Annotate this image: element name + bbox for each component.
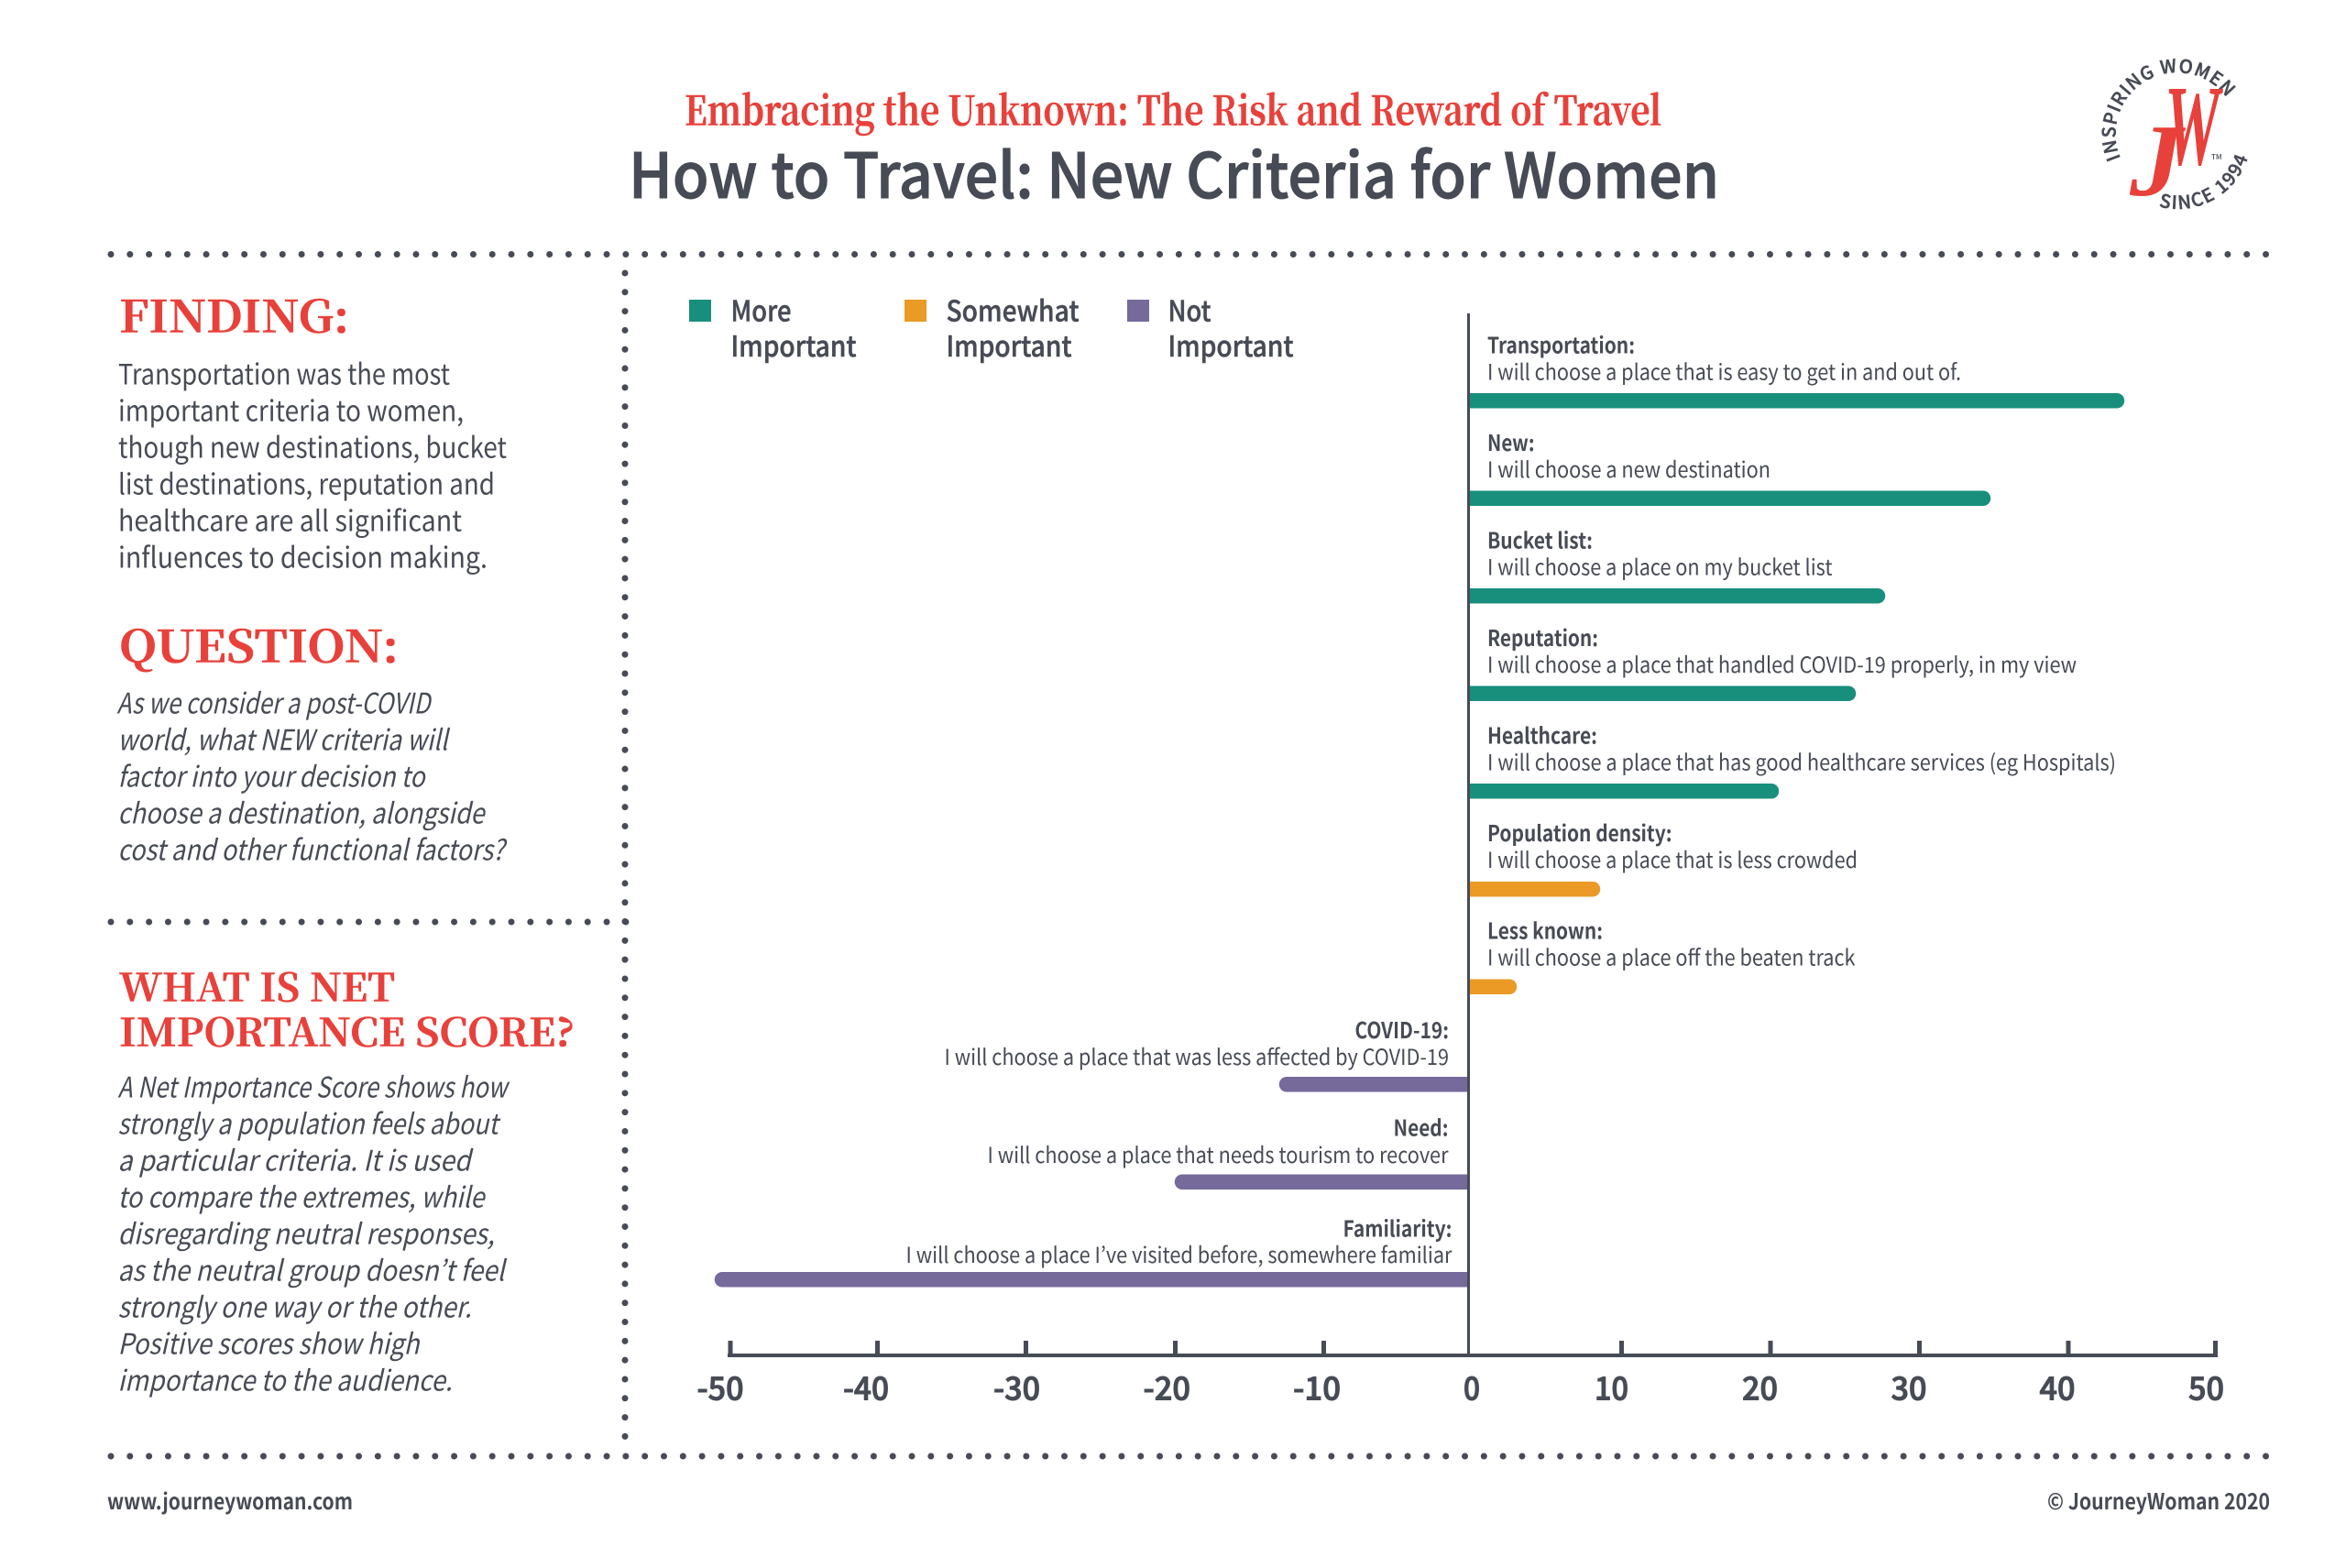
row: reputation: I will choose a place that handled COVID-19 properly, in my view — [1487, 647, 2077, 679]
question text — [117, 680, 508, 869]
net importance explanation: a particular criteria. It is used — [117, 1138, 474, 1179]
net importance explanation: disregarding neutral responses, — [117, 1212, 495, 1252]
footer — [107, 1484, 2270, 1516]
row: covid-19 — [944, 1013, 1468, 1092]
x axis labels — [696, 1364, 2224, 1409]
heading: net importance score: IMPORTANCE SCORE? — [119, 1003, 575, 1058]
finding text: healthcare are all significant — [118, 499, 462, 539]
row: covid-19: I will choose a place that was less affected by COVID-19 — [944, 1039, 1449, 1071]
row: reputation — [1468, 620, 2077, 701]
row: familiarity: Familiarity: — [1343, 1212, 1452, 1243]
title: How to Travel: New Criteria for Women — [629, 126, 1719, 216]
panel: finding — [118, 282, 507, 576]
legend: not important — [1127, 288, 1294, 365]
legend: not important: Important — [1168, 323, 1294, 365]
heading: net importance score: WHAT IS NET — [119, 959, 395, 1014]
subtitle: Embracing the Unknown: The Risk and Reward of Travel — [685, 79, 1661, 137]
legend: somewhat important: Somewhat — [946, 288, 1080, 330]
finding text: Transportation was the most — [118, 352, 450, 392]
row: new: I will choose a new destination — [1487, 452, 1770, 484]
finding text: though new destinations, bucket — [118, 425, 507, 466]
x axis labels: 0 — [1464, 1364, 1480, 1409]
x axis labels: 10 — [1595, 1364, 1628, 1409]
row: healthcare: I will choose a place that has good healthcare services (eg Hospitals) — [1487, 744, 2116, 777]
logo monogram — [2129, 63, 2223, 218]
net importance explanation: importance to the audience. — [117, 1358, 453, 1398]
finding text: influences to decision making. — [118, 535, 488, 576]
x axis labels: -40 — [843, 1364, 889, 1409]
row: new: New: — [1487, 425, 1534, 457]
legend: more important: Important — [731, 323, 856, 365]
row: reputation: Reputation: — [1487, 620, 1598, 652]
row: new — [1468, 425, 1990, 506]
header title block — [629, 79, 1719, 216]
row: bucket list — [1468, 522, 1885, 603]
row: less known: Less known: — [1487, 913, 1603, 946]
x axis labels: -20 — [1144, 1364, 1190, 1409]
row: less known — [1468, 913, 1855, 994]
legend: more important — [689, 288, 856, 365]
net importance explanation: Positive scores show high — [117, 1321, 421, 1362]
logo monogram: J — [2129, 104, 2186, 218]
x axis labels: 20 — [1742, 1364, 1778, 1409]
x axis labels: -30 — [993, 1364, 1040, 1409]
question text: As we consider a post-COVID — [117, 680, 433, 722]
row: transportation — [1468, 328, 2124, 409]
legend: somewhat important: Important — [946, 323, 1072, 365]
row: population density: I will choose a place that is less crowded — [1487, 842, 1858, 874]
x axis — [696, 1341, 2224, 1409]
question text: cost and other functional factors? — [117, 827, 508, 869]
panel: question — [117, 612, 508, 869]
net importance explanation: A Net Importance Score shows how — [117, 1065, 510, 1105]
question text: world, what NEW criteria will — [117, 717, 450, 759]
logo: JourneyWoman badge — [2101, 59, 2247, 218]
row: transportation: I will choose a place that is easy to get in and out of. — [1487, 354, 1961, 387]
heading: finding: FINDING: — [119, 282, 349, 345]
row: familiarity — [715, 1212, 1468, 1287]
x axis labels: 40 — [2040, 1364, 2075, 1409]
finding text — [118, 352, 507, 576]
heading: question: QUESTION: — [119, 612, 399, 674]
row: need: Need: — [1393, 1111, 1448, 1142]
legend: somewhat important — [904, 288, 1080, 365]
logo monogram: W — [2165, 63, 2223, 190]
net importance explanation: as the neutral group doesn’t feel — [117, 1248, 507, 1288]
legend — [689, 288, 1294, 365]
footer: website: www.journeywoman.com — [107, 1484, 353, 1516]
question text: factor into your decision to — [117, 753, 426, 795]
row: healthcare — [1468, 718, 2116, 799]
x axis labels: -50 — [696, 1364, 744, 1409]
row: covid-19: COVID-19: — [1354, 1013, 1449, 1045]
bar chart: net importance score — [696, 313, 2224, 1409]
row: population density — [1468, 816, 1858, 896]
logo: JourneyWoman badge: TM — [2211, 152, 2222, 162]
row: less known: I will choose a place off the beaten track — [1487, 940, 1855, 971]
row: need — [988, 1111, 1468, 1190]
row: bucket list: Bucket list: — [1487, 522, 1593, 555]
logo: JourneyWoman badge: INSPIRING WOMEN — [2101, 59, 2236, 161]
net importance explanation: strongly one way or the other. — [117, 1285, 471, 1325]
x axis labels: 30 — [1891, 1364, 1926, 1409]
row: familiarity: I will choose a place I’ve visited before, somewhere familiar — [905, 1237, 1453, 1269]
net importance explanation: strongly a population feels about — [117, 1102, 500, 1142]
panel: net importance score — [117, 959, 575, 1398]
row: need: I will choose a place that needs tourism to recover — [988, 1137, 1449, 1169]
legend: more important: More — [731, 288, 792, 330]
legend: not important: Not — [1168, 288, 1211, 330]
footer: copyright: © JourneyWoman 2020 — [2047, 1484, 2270, 1516]
row: healthcare: Healthcare: — [1487, 718, 1597, 750]
finding text: important criteria to women, — [118, 389, 464, 429]
x axis labels: -10 — [1293, 1364, 1341, 1409]
logo: JourneyWoman badge: SINCE 1994 — [2159, 154, 2247, 209]
heading: net importance score — [119, 959, 575, 1058]
net importance explanation — [117, 1065, 510, 1398]
row: transportation: Transportation: — [1487, 328, 1635, 359]
finding text: list destinations, reputation and — [118, 462, 495, 502]
x axis labels: 50 — [2188, 1364, 2224, 1409]
question text: choose a destination, alongside — [117, 790, 487, 832]
net importance explanation: to compare the extremes, while — [117, 1175, 487, 1215]
zero axis — [1467, 313, 1470, 1355]
row: bucket list: I will choose a place on my bucket list — [1487, 550, 1833, 581]
row: population density: Population density: — [1487, 816, 1672, 848]
